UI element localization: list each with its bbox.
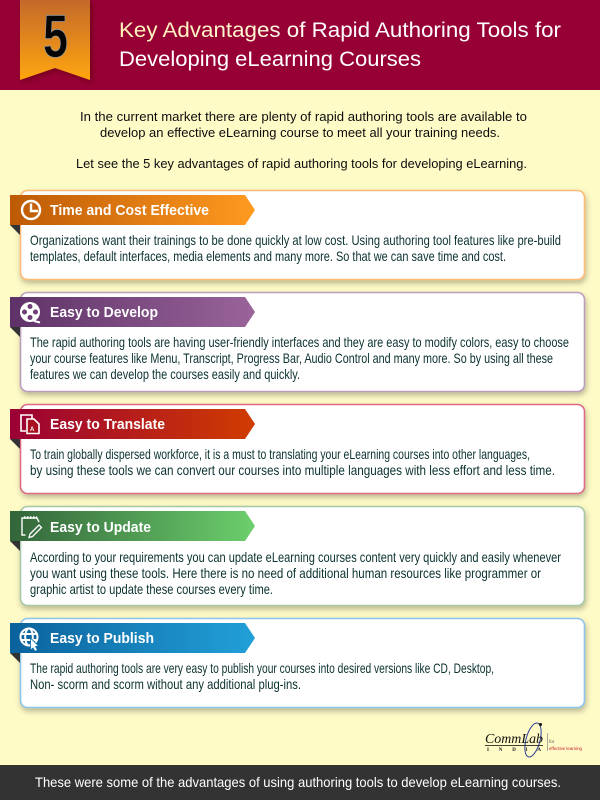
icon: number 5 ribbon: [20, 0, 90, 80]
panel: time and cost effective: [10, 190, 584, 280]
icon: notepad and pencil: [22, 518, 42, 538]
body text: graphic artist to update these courses every time.: [30, 581, 273, 597]
intro text: Let see the 5 key advantages of rapid authoring tools for developing eLearning.: [76, 157, 527, 171]
icon: translated documents: [21, 415, 39, 434]
ribbon heading: develop: [10, 297, 255, 337]
logo: CommLab India: effective learning: [549, 746, 582, 751]
panel: easy to publish: [10, 618, 584, 708]
footer bar: These were some of the advantages of using authoring tools to develop eLearning courses.: [35, 774, 561, 790]
title: Developing eLearning Courses: [119, 47, 421, 71]
title: [119, 18, 561, 71]
ribbon heading: update: Easy to Update: [50, 520, 151, 536]
panel: easy to develop: [10, 292, 584, 392]
body text: [30, 446, 555, 478]
ribbon heading: time and cost: [10, 195, 255, 235]
ribbon heading: translate: Easy to Translate: [50, 417, 165, 433]
logo: CommLab India: INDIA: [487, 748, 541, 753]
intro text: develop an effective eLearning course to meet all your training needs.: [100, 126, 500, 140]
logo: CommLab India: CommLab: [485, 732, 543, 747]
panel: easy to update: [10, 506, 584, 606]
logo: CommLab India: [485, 721, 582, 759]
title: Key Advantages of Rapid Authoring Tools for: [119, 18, 561, 42]
body text: features we can develop the courses easily and quickly.: [30, 366, 300, 382]
ribbon heading: time and cost: Time and Cost Effective: [50, 203, 209, 219]
icon: clock: [22, 201, 40, 219]
body text: [30, 549, 561, 597]
panel: easy to translate: [10, 404, 584, 494]
body text: [30, 660, 494, 692]
logo: CommLab India: for: [549, 739, 555, 744]
body text: Non- scorm and scorm without any additional plug-ins.: [30, 676, 301, 692]
footer bar: [0, 765, 600, 800]
ribbon heading: develop: Easy to Develop: [50, 305, 158, 321]
icon: film reel: [20, 302, 40, 322]
body text: [30, 334, 569, 382]
icon: globe with cursor: [20, 628, 38, 652]
ribbon heading: publish: [10, 623, 255, 663]
body text: [30, 232, 561, 264]
ribbon heading: translate: [10, 409, 255, 449]
icon: number 5 ribbon: 5: [43, 3, 68, 70]
intro text: [76, 110, 527, 171]
ribbon heading: update: [10, 511, 255, 551]
header banner: [0, 0, 600, 90]
ribbon heading: publish: Easy to Publish: [50, 631, 154, 647]
icon: translated documents: A: [30, 427, 35, 433]
intro text: In the current market there are plenty of rapid authoring tools are available to: [80, 110, 527, 124]
